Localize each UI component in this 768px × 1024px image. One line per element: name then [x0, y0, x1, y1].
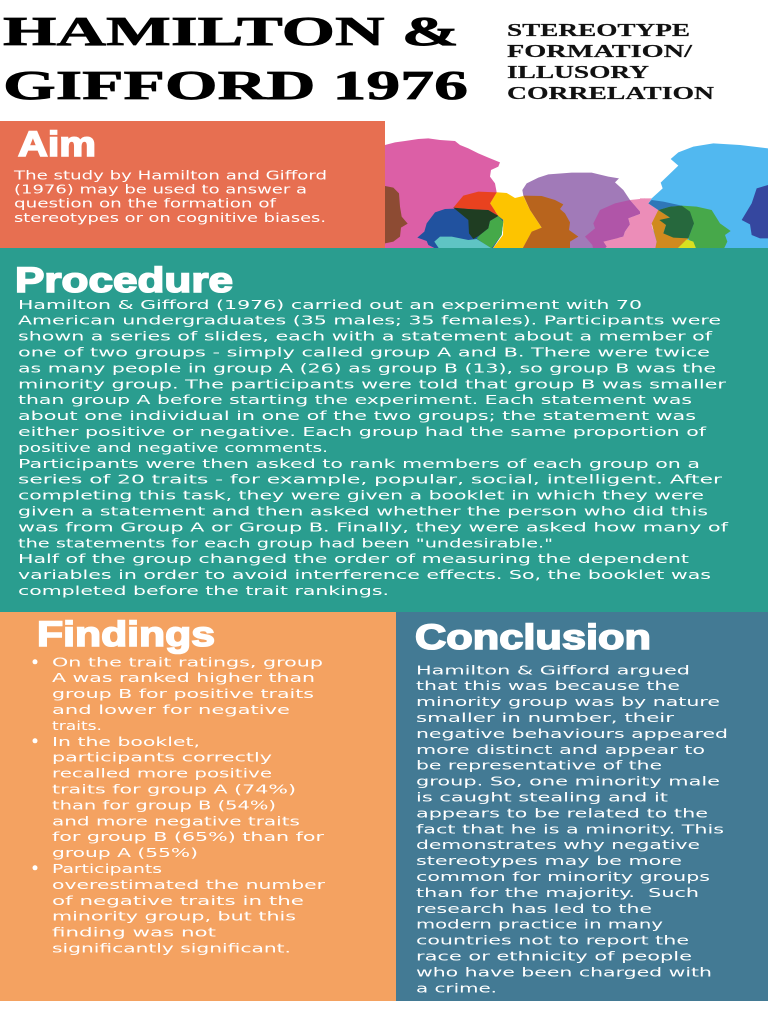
- text block: procedure: as many people in group A (26) as group B (13), so group B was the: [18, 360, 716, 375]
- text block: conclusion: a crime.: [416, 980, 497, 995]
- bullet list: findings: minority group, but this: [52, 909, 296, 924]
- text block: conclusion: who have been charged with: [416, 964, 712, 979]
- text block: conclusion: [416, 662, 728, 995]
- text block: conclusion: more distinct and appear to: [416, 742, 705, 757]
- panel: conclusion: [396, 612, 768, 1001]
- text block: procedure: completed before the trait rankings.: [18, 583, 389, 598]
- text block: procedure: positive and negative comments.: [18, 440, 328, 455]
- text block: procedure: Hamilton & Gifford (1976) carried out an experiment with 70: [18, 297, 642, 312]
- bullet list: findings: traits.: [52, 718, 102, 733]
- bullet list: findings: traits for group A (74%): [52, 782, 296, 797]
- subtitle: [507, 20, 714, 103]
- bullet list: findings: [32, 654, 326, 956]
- title: HAMILTON &: [3, 8, 459, 54]
- text block: conclusion: demonstrates why negative: [416, 837, 700, 852]
- text block: conclusion: stereotypes may be more: [416, 853, 682, 868]
- heading: aim: Aim: [18, 125, 96, 164]
- text block: procedure: the statements for each group had been "undesirable.": [18, 535, 553, 550]
- bullet list: findings: and lower for negative: [52, 702, 290, 717]
- title: [3, 8, 468, 108]
- bullet list: findings: group B for positive traits: [52, 686, 314, 701]
- text block: procedure: about one individual in one of the two groups; the statement was: [18, 408, 696, 423]
- bullet list: findings: In the booklet,: [52, 734, 200, 749]
- heading: conclusion: Conclusion: [415, 618, 651, 657]
- bullet list: findings: finding was not: [52, 925, 216, 940]
- panel: aim: [0, 121, 385, 248]
- subtitle: CORRELATION: [507, 83, 714, 103]
- text block: conclusion: race or ethnicity of people: [416, 949, 692, 964]
- subtitle: FORMATION/: [507, 41, 694, 61]
- text block: conclusion: modern practice in many: [416, 917, 664, 932]
- text block: procedure: minority group. The participants were told that group B was smaller: [18, 376, 727, 391]
- text block: procedure: Half of the group changed the order of measuring the dependent: [18, 551, 689, 566]
- text block: conclusion: appears to be related to the: [416, 805, 708, 820]
- subtitle: STEREOTYPE: [507, 20, 690, 40]
- text block: conclusion: fact that he is a minority. This: [416, 821, 724, 836]
- text block: conclusion: common for minority groups: [416, 869, 710, 884]
- text block: conclusion: minority group was by nature: [416, 694, 720, 709]
- illustration: overlapping coloured head silhouettes: [385, 138, 768, 250]
- text block: procedure: either positive or negative. Each group had the same proportion of: [18, 424, 707, 439]
- bullet list: findings: On the trait ratings, group: [52, 654, 323, 669]
- bullet list: findings: participants correctly: [52, 750, 273, 765]
- text block: procedure: Participants were then asked to rank members of each group on a: [18, 456, 700, 471]
- text block: aim: question on the formation of: [14, 196, 277, 210]
- title: GIFFORD 1976: [3, 62, 468, 108]
- bullet list: findings: group A (55%): [52, 845, 198, 860]
- text block: procedure: variables in order to avoid interference effects. So, the booklet was: [18, 567, 711, 582]
- bullet list: findings: Participants: [52, 861, 162, 876]
- text block: conclusion: research has led to the: [416, 901, 652, 916]
- text block: procedure: completing this task, they were given a booklet in which they were: [18, 488, 704, 503]
- text block: conclusion: be representative of the: [416, 758, 662, 773]
- text block: procedure: one of two groups - simply called group A and B. There were twice: [18, 345, 710, 360]
- text block: aim: (1976) may be used to answer a: [14, 182, 307, 196]
- text block: aim: stereotypes or on cognitive biases.: [14, 210, 326, 225]
- text block: procedure: series of 20 traits - for example, popular, social, intelligent. After: [18, 472, 723, 487]
- text block: procedure: than group A before starting the experiment. Each statement was: [18, 392, 692, 407]
- bullet list: findings: recalled more positive: [52, 766, 272, 781]
- text block: aim: The study by Hamilton and Gifford: [13, 168, 327, 182]
- text block: conclusion: group. So, one minority male: [416, 774, 720, 789]
- text block: conclusion: countries not to report the: [416, 933, 689, 948]
- bullet list: findings: of negative traits in the: [52, 893, 304, 908]
- text block: procedure: [18, 297, 729, 598]
- text block: conclusion: is caught stealing and it: [416, 790, 668, 805]
- bullet list: findings: significantly significant.: [52, 941, 291, 956]
- bullet list: findings: for group B (65%) than for: [52, 829, 325, 844]
- text block: aim: [13, 168, 327, 225]
- text block: conclusion: negative behaviours appeared: [416, 726, 728, 741]
- heading: findings: Findings: [37, 615, 215, 654]
- bullet list: findings: A was ranked higher than: [52, 670, 315, 685]
- panel: findings: [0, 612, 396, 1001]
- heading: procedure: Procedure: [15, 261, 233, 300]
- text block: conclusion: Hamilton & Gifford argued: [416, 662, 690, 677]
- text block: procedure: was from Group A or Group B. Finally, they were asked how many of: [18, 519, 729, 534]
- text block: procedure: shown a series of slides, each with a statement about a member of: [18, 329, 713, 344]
- text block: conclusion: smaller in number, their: [416, 710, 675, 725]
- text block: conclusion: that this was because the: [416, 678, 680, 693]
- text block: procedure: given a statement and then asked whether the person who did this: [18, 504, 708, 519]
- panel: procedure: [0, 248, 768, 612]
- bullet list: findings: overestimated the number: [52, 877, 326, 892]
- bullet list: findings: and more negative traits: [52, 813, 300, 828]
- bullet list: findings: than for group B (54%): [52, 797, 276, 812]
- subtitle: ILLUSORY: [507, 62, 649, 82]
- text block: procedure: American undergraduates (35 males; 35 females). Participants were: [18, 313, 721, 328]
- text block: conclusion: than for the majority. Such: [416, 885, 699, 900]
